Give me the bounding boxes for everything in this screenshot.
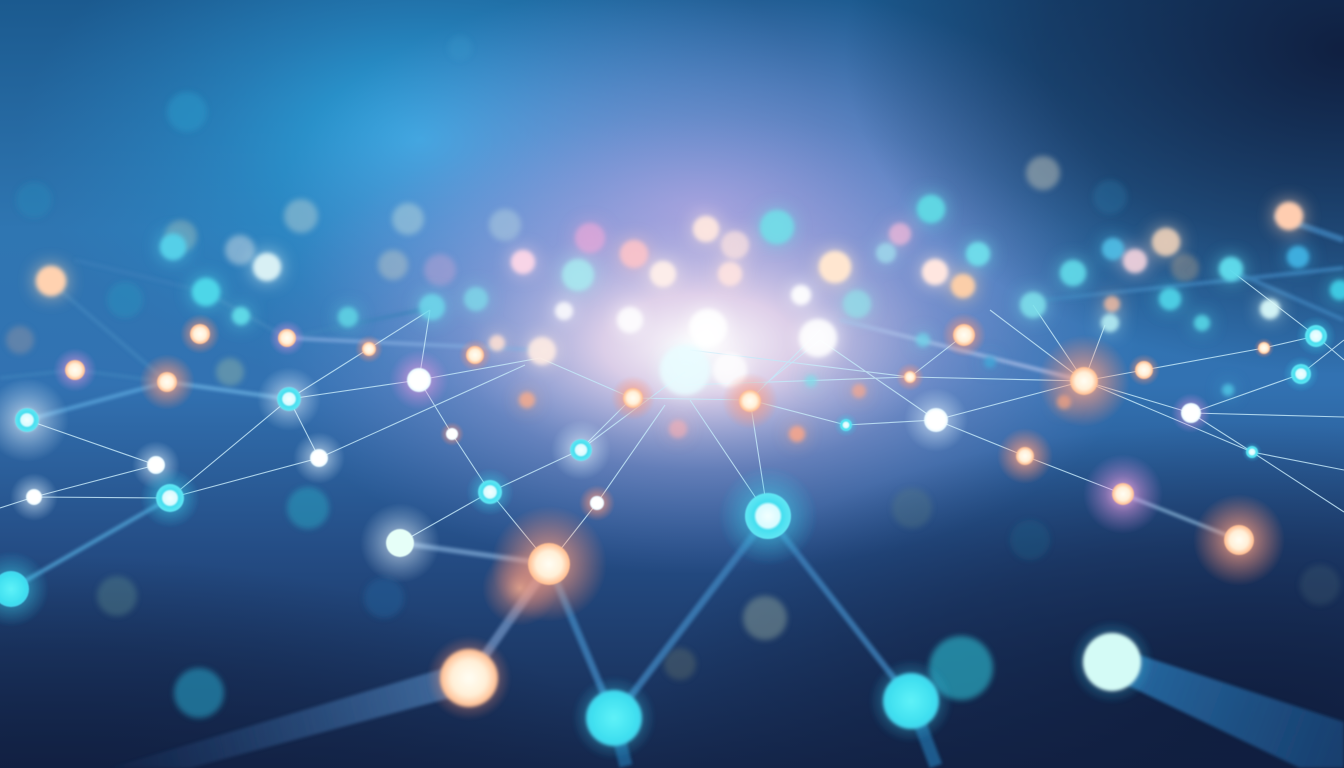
node: white lower [360,503,440,583]
orb: pale [1070,620,1154,704]
node: tiny pink [896,363,924,391]
node: bright peach [491,506,607,622]
node: white right [904,388,968,452]
node: tiny white [440,422,464,446]
node: cyan ring far right [1296,316,1336,356]
node: tiny peach right [1128,354,1160,386]
node: peach glow offset [482,550,558,626]
node: tiny cyan [834,413,858,437]
node: left ring [0,378,69,462]
orb: cyan centre [572,676,656,760]
node: tiny white far right [1254,338,1274,358]
node: ring far right [1283,356,1319,392]
node: pink left [53,348,97,392]
node: cyan ring mid [466,468,514,516]
node: large cyan ring [718,466,818,566]
glowing network nodes [0,313,1336,627]
node: peach small [180,314,220,354]
orb: peach [427,636,511,720]
node: orange far right [1193,494,1285,586]
node: peach upper right [942,313,986,357]
orb: cyan right [869,659,953,743]
thick blurred foreground links [0,216,1344,768]
node: left white [132,441,180,489]
node: white ring [257,367,321,431]
node: pink right [1083,454,1163,534]
node: peach centre 2 [722,373,778,429]
node: bright right [1038,335,1130,427]
node: tiny cyan right [1242,442,1262,462]
node: small pink lower [579,485,615,521]
node: tiny peach [355,335,383,363]
node: peach centre [611,376,655,420]
node: peach left [139,354,195,410]
thin network lines [0,270,1344,564]
node: cyan ring [140,468,200,528]
node: white right 2 [1171,393,1211,433]
node: pink ring [389,350,449,410]
node: cyan edge [0,551,49,627]
halo behind soft nodes [36,195,1344,442]
large foreground orbs [427,620,1154,760]
node: ring centre [551,420,611,480]
node: white halo [293,432,345,484]
node: pink small [269,320,305,356]
node: peach right [997,428,1053,484]
node: peach small 2 [459,339,491,371]
node: small white left [10,473,58,521]
soft upper nodes [36,195,1344,442]
